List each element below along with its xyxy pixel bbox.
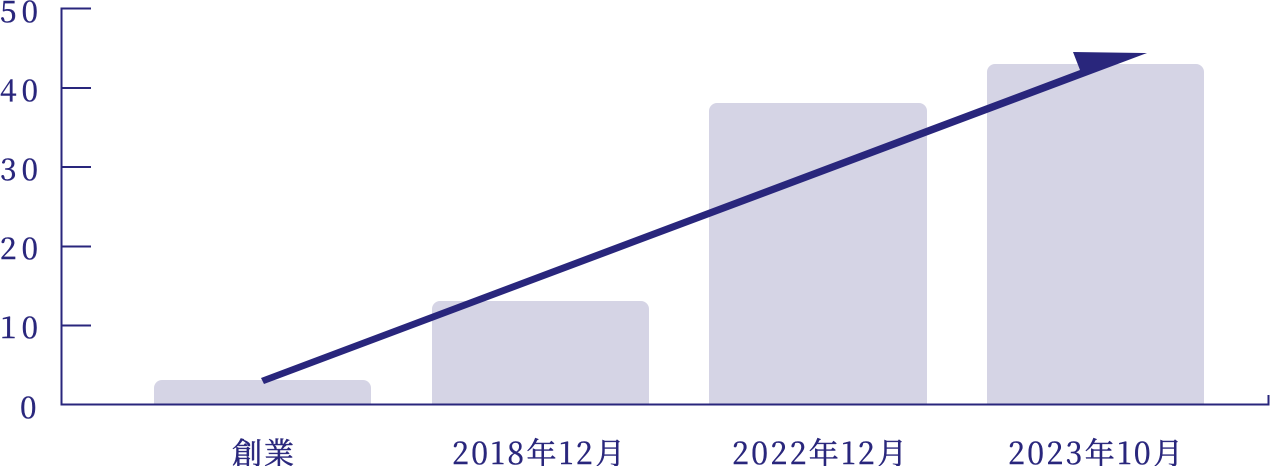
label 10: 10: [0, 303, 38, 347]
bar: 創業: [154, 380, 371, 405]
label 30: 30: [0, 145, 38, 189]
growth arrow: [261, 52, 1147, 384]
label 40: 40: [0, 66, 38, 110]
label 0: 0: [20, 383, 36, 427]
x axis labels: [232, 429, 1183, 466]
y axis labels: [0, 0, 38, 427]
bar: 2022年12月: [709, 103, 927, 405]
label 20: 20: [0, 224, 38, 268]
bar: 2023年10月: [987, 64, 1204, 405]
bar: 2018年12月: [432, 301, 649, 405]
bars: [154, 64, 1204, 405]
